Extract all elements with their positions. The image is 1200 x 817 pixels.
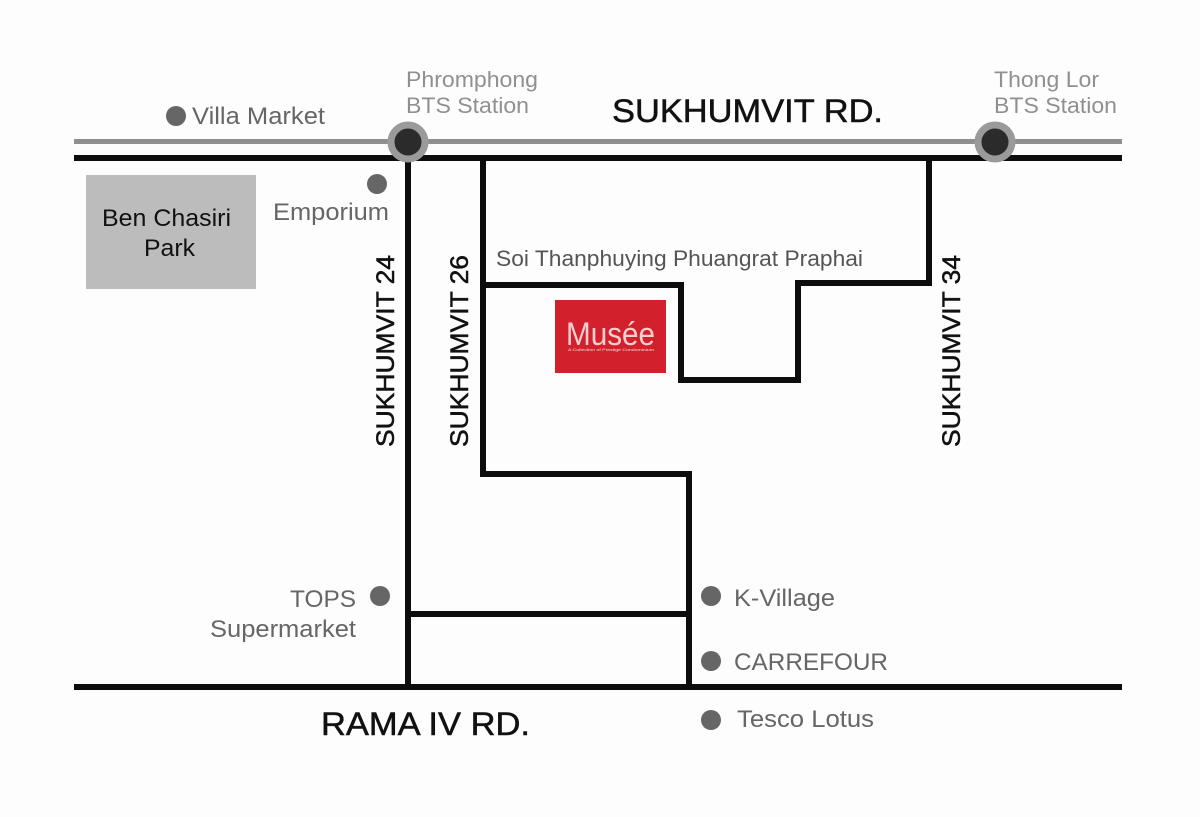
label: Sukhumvit 24: SUKHUMVIT 24 bbox=[372, 255, 400, 447]
label: Thong Lor BTS Station: BTS Station bbox=[994, 93, 1117, 118]
heading: Rama IV Rd: RAMA IV RD. bbox=[321, 706, 530, 742]
label: Sukhumvit 34: SUKHUMVIT 34 bbox=[938, 255, 966, 447]
logo: Musee: A Collection of Prestige Condominium bbox=[568, 347, 655, 352]
landmark: Emporium bbox=[273, 174, 389, 226]
icon: Thong Lor station bbox=[978, 125, 1012, 159]
label: Sukhumvit 26: SUKHUMVIT 26 bbox=[446, 255, 474, 447]
BTS rail line bbox=[74, 139, 1122, 144]
panel: Ben Chasiri Park: Ben Chasiri bbox=[102, 205, 231, 232]
logo: Musee: Musée bbox=[566, 316, 655, 352]
logo: Musee bbox=[555, 300, 666, 373]
landmark: TOPS Supermarket: Supermarket bbox=[210, 616, 356, 643]
landmark: K-Village: K-Village bbox=[734, 585, 835, 612]
label: Soi Thanphuying Phuangrat Praphai: Soi Thanphuying Phuangrat Praphai bbox=[496, 246, 863, 271]
landmark: TOPS Supermarket: TOPS bbox=[290, 586, 356, 613]
panel: Ben Chasiri Park: Park bbox=[144, 235, 196, 262]
panel: Ben Chasiri Park bbox=[86, 175, 256, 289]
label: Phromphong BTS Station: BTS Station bbox=[406, 93, 529, 118]
road network bbox=[74, 158, 1122, 687]
icon: Phrom Phong station bbox=[391, 125, 425, 159]
heading: Sukhumvit Rd: SUKHUMVIT RD. bbox=[612, 93, 883, 129]
label: Phromphong BTS Station: Phromphong bbox=[406, 67, 538, 92]
landmark: Tesco Lotus: Tesco Lotus bbox=[737, 706, 874, 733]
landmark: Villa Market: Villa Market bbox=[192, 103, 325, 130]
landmark: Carrefour: CARREFOUR bbox=[734, 649, 888, 676]
landmark: Emporium: Emporium bbox=[273, 199, 389, 226]
label: Thong Lor BTS Station: Thong Lor bbox=[994, 67, 1099, 92]
landmark: TOPS Supermarket bbox=[210, 586, 390, 643]
